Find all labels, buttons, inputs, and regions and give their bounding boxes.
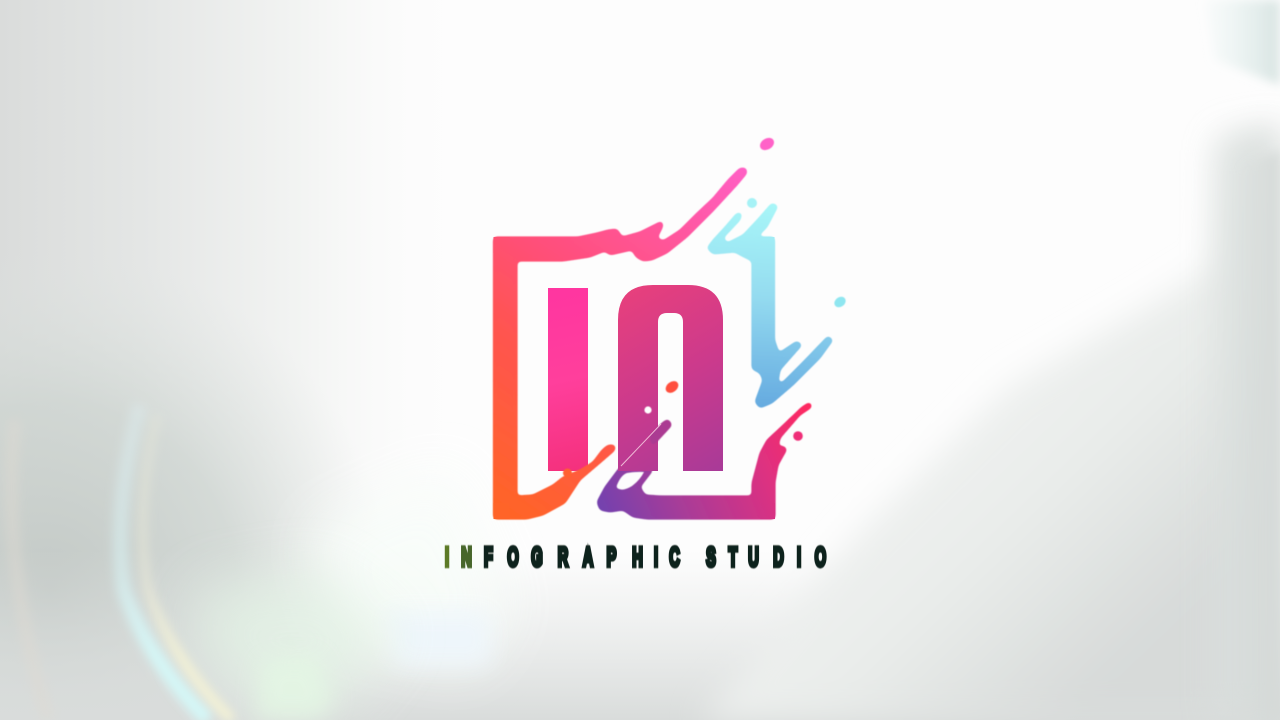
- frame corner: bottom right: [760, 503, 775, 519]
- letter N arch: [618, 285, 723, 471]
- frame corner: top left: [494, 237, 510, 253]
- highlight streak: [621, 424, 661, 466]
- frame corner: bottom left: [494, 503, 510, 519]
- splash finger tip over N: [650, 419, 672, 446]
- frame: magenta and purple bottom with splash: [597, 402, 812, 519]
- rainbow lens arc: [11, 405, 232, 720]
- frame: red top-left with splash: [494, 168, 747, 519]
- letter I: [548, 288, 588, 471]
- logo mark: [494, 135, 848, 519]
- frame: blue right side with splash: [707, 203, 833, 408]
- droplets: [563, 135, 848, 478]
- frame corner: top right: [760, 237, 774, 251]
- wordmark: I N FOGRAPHIC STUDIO: [445, 541, 826, 572]
- white opening in splash: [617, 472, 644, 490]
